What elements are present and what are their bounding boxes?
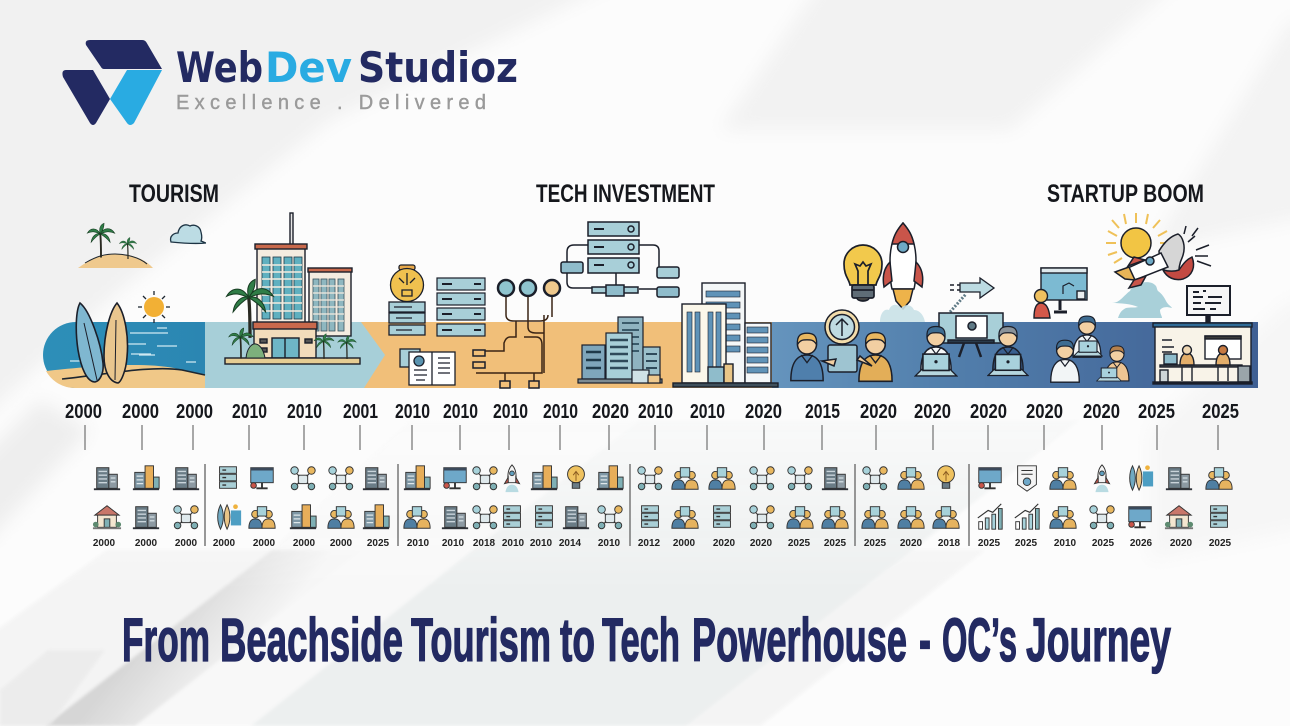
small icon group 6: 2026 [1130,538,1153,549]
heading: tourism: TOURISM [129,180,219,208]
timeline year labels: 2020 [745,401,782,423]
icon: sun with rays [1106,213,1170,263]
timeline year labels: 2020 [1026,401,1063,423]
small icon group 2: 2025 [367,538,390,549]
small icon group 5: 2018 [938,538,961,549]
small icon group 4: 2025 [824,538,847,549]
small icon group 4: 2012 [638,538,661,549]
timeline year labels: 2010 [638,401,673,423]
timeline year labels: 2025 [1202,401,1239,423]
logo wordmark: Studioz [358,43,518,92]
timeline year labels: 2020 [970,401,1007,423]
icon: teal cloud [1112,282,1172,318]
title: Journey [1026,606,1171,674]
icon: surfboards [76,303,128,383]
icon: network circuit [473,280,560,388]
icon: office workspace [1153,286,1252,384]
timeline year labels: 2000 [176,401,213,423]
small icon group 4: 2000 [673,538,696,549]
small icon group 3: 2018 [473,538,496,549]
timeline year labels: 2015 [805,401,840,423]
logo tagline: Excellence . Delivered [176,92,486,114]
timeline year labels: 2010 [443,401,478,423]
timeline year labels: 2020 [914,401,951,423]
small icon group 6 [978,465,1232,549]
logo wordmark: Web [176,43,263,92]
small icon group 3: 2010 [442,538,465,549]
title: Tourism [411,606,551,674]
icon: monitor with kid [1034,268,1087,318]
title: - [919,606,931,674]
icon: light bulb [844,245,882,301]
small icon group 5 [862,466,961,549]
title: to [560,606,595,674]
icon: launching rocket [1115,226,1211,288]
small icon group 6: 2010 [1054,538,1077,549]
timeline year labels: 2010 [690,401,725,423]
arrow: pointing right [950,278,994,312]
icon: person at laptop left [915,326,957,376]
icon: sun [138,291,170,323]
icon: tall office towers [673,283,778,387]
title: From [122,606,210,674]
icon: cloud [171,225,206,243]
icon: rocket smoke [880,305,925,322]
small icon group 3: 2010 [530,538,553,549]
logo: WebDev Studioz [62,40,518,125]
icon: palm island [78,223,153,268]
small icon group 2: 2000 [253,538,276,549]
timeline year labels: 2010 [287,401,322,423]
icon: palm trees by hotel [227,279,356,359]
logo wordmark: Dev [265,43,352,92]
icon: server cloud diagram [561,222,679,297]
small icon group 4: 2020 [713,538,736,549]
small icon group 4: 2025 [788,538,811,549]
icon: hotel with palms [225,213,360,364]
small icon group 4 [638,467,848,549]
small icon group 3: 2010 [598,538,621,549]
timeline year labels: 2000 [65,401,102,423]
title: Beachside [220,606,403,674]
small icon group 6: 2020 [1170,538,1193,549]
logo mark [62,40,162,125]
small icon group 3 [404,465,623,549]
title: Powerhouse [692,606,907,674]
title: Tech [602,606,680,674]
small icon group 1 [93,466,199,549]
timeline band [43,322,1258,388]
timeline year labels: 2001 [343,401,378,423]
small icon group 3: 2010 [407,538,430,549]
timeline year labels: 2010 [493,401,528,423]
icon: team at laptops [1051,316,1129,382]
title: OC’s [942,606,1017,674]
title [122,606,1171,674]
icon: document [400,349,455,385]
icon: person at laptop right [988,326,1028,376]
timeline year labels: 2020 [860,401,897,423]
timeline year labels: 2000 [122,401,159,423]
small icon group 1: 2000 [93,538,116,549]
small icon group 6: 2025 [1092,538,1115,549]
small icon group 1: 2000 [135,538,158,549]
small icon group 2 [213,467,390,549]
timeline year labels: 2020 [592,401,629,423]
icon: city buildings [578,317,662,383]
icon: presentation board [939,313,1003,357]
small icon group 4: 2020 [750,538,773,549]
small icon group 3: 2014 [559,538,582,549]
timeline year labels: 2025 [1138,401,1175,423]
icon: rocket [883,223,923,309]
small icon group 5: 2025 [864,538,887,549]
timeline year labels: 2010 [395,401,430,423]
small icon group 6: 2025 [1209,538,1232,549]
icon: server rack [437,278,485,336]
timeline year labels [65,401,1239,423]
icon: bulb and panels [389,265,425,335]
small icon group 6: 2025 [978,538,1001,549]
small icon group 5: 2020 [900,538,923,549]
small icon group 2: 2000 [213,538,236,549]
small icon group 3: 2010 [502,538,525,549]
logo wordmark [176,43,518,92]
icon: people with tablet [791,310,892,381]
small icon group 2: 2000 [293,538,316,549]
timeline year labels: 2010 [543,401,578,423]
timeline year labels: 2020 [1083,401,1120,423]
timeline year labels: 2010 [232,401,267,423]
heading: tech investment: TECH INVESTMENT [536,180,715,208]
heading: startup boom: STARTUP BOOM [1047,180,1204,208]
small icon group 2: 2000 [330,538,353,549]
small icon group 1: 2000 [175,538,198,549]
small icon group 6: 2025 [1015,538,1038,549]
